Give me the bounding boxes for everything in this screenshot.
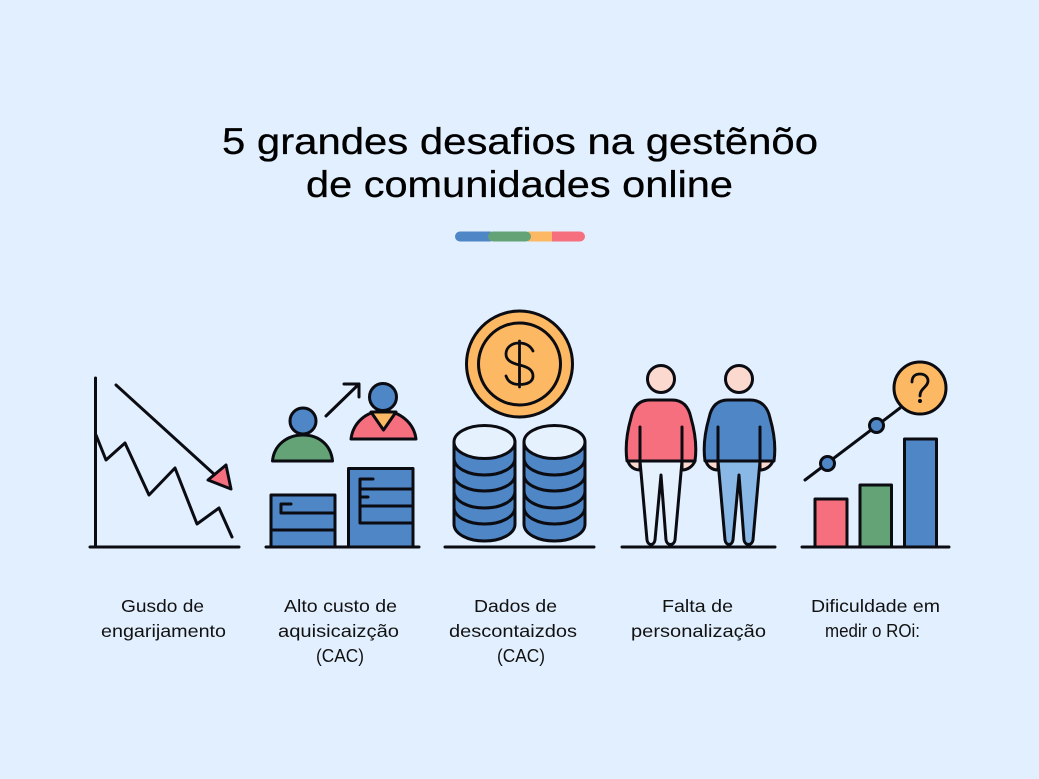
person: red sweater — [626, 366, 696, 544]
icon: two people — [622, 366, 775, 547]
label: engagement — [101, 596, 226, 641]
label: acquisition cost: aquisicaizção — [278, 621, 399, 641]
title: de comunidades online — [306, 164, 733, 205]
title: 5 grandes desafios na gestẽnõo — [222, 121, 818, 162]
label: personalization — [631, 596, 766, 641]
label: ROI — [811, 596, 940, 641]
label: personalization: personalização — [631, 621, 766, 641]
label: data: descontaizdos — [449, 621, 577, 641]
label: acquisition cost: (CAC) — [316, 646, 364, 666]
multicolour divider — [455, 232, 585, 242]
icon: ROI bar chart with question mark — [802, 362, 949, 547]
icon: acquisition cost — [266, 384, 419, 547]
label: ROI: medir o ROi: — [825, 621, 920, 641]
title — [222, 121, 818, 205]
icon: falling engagement chart — [90, 378, 239, 547]
label: acquisition cost — [278, 596, 399, 666]
label: acquisition cost: Alto custo de — [284, 596, 397, 616]
label: data: Dados de — [474, 596, 557, 616]
label: engagement: Gusdo de — [121, 596, 204, 616]
label: data — [449, 596, 577, 666]
label: data: (CAC) — [497, 646, 545, 666]
label: engagement: engarijamento — [101, 621, 226, 641]
label: personalization: Falta de — [662, 596, 733, 616]
label: ROI: Dificuldade em — [811, 596, 940, 616]
icon: coin and data stacks — [445, 311, 594, 547]
person: blue sweater — [704, 366, 775, 544]
